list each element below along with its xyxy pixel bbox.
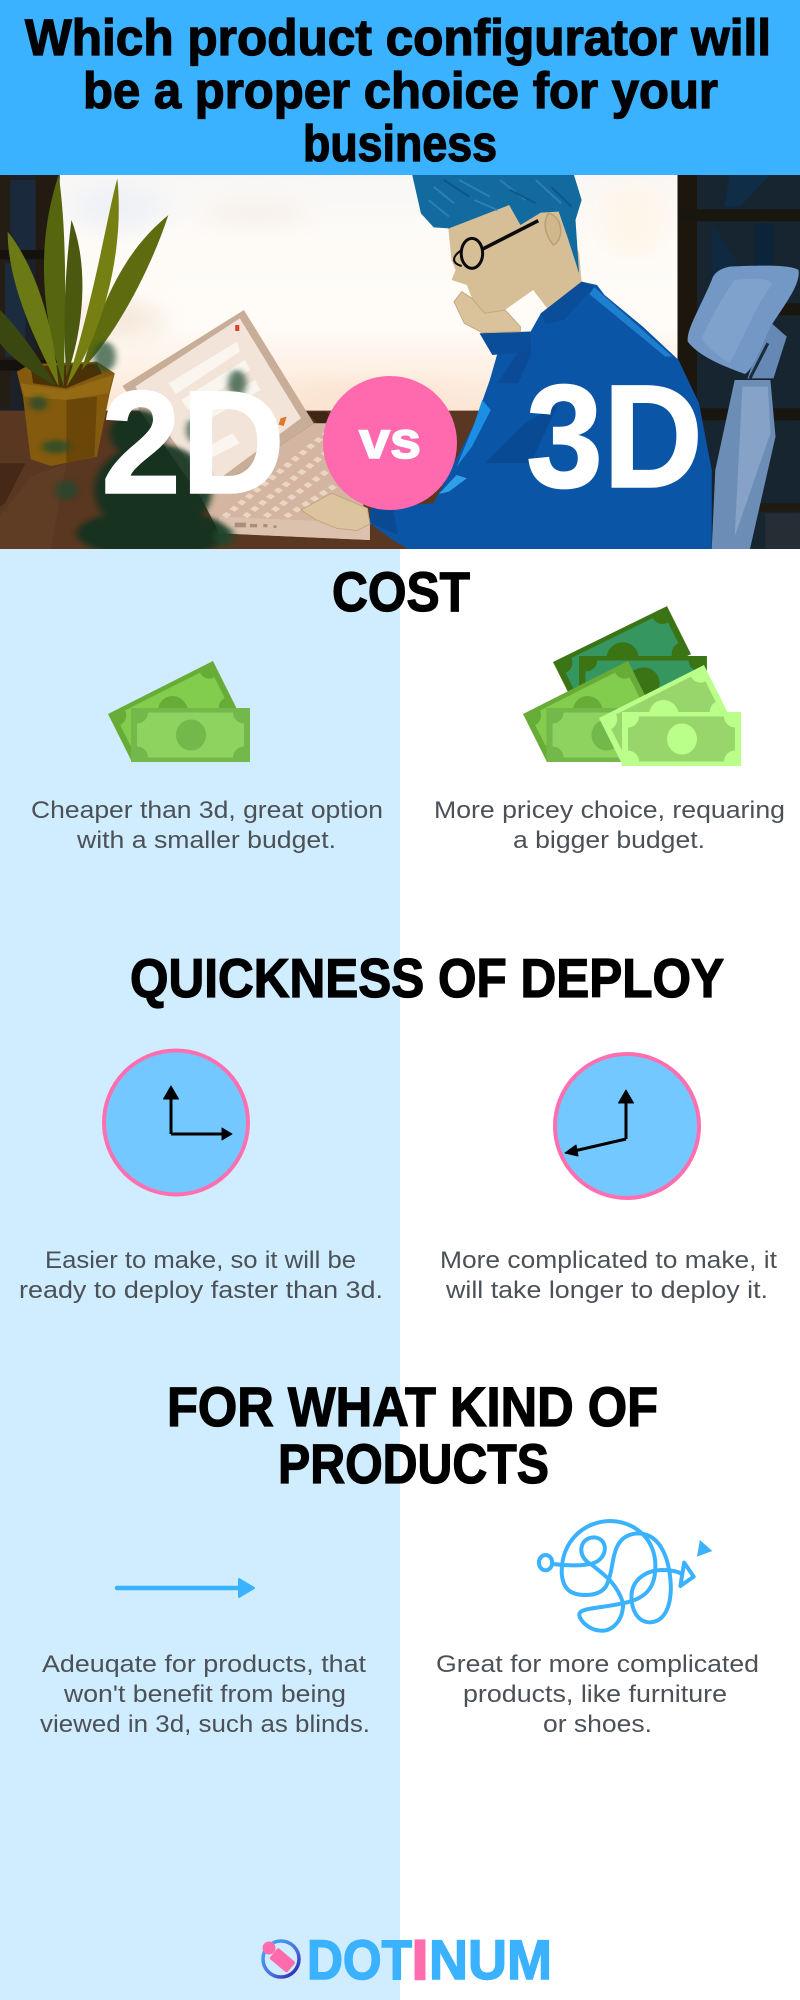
text: cost 3D: More pricey choice, requaring <box>434 797 785 824</box>
label: 2D: 2D <box>101 361 285 525</box>
man: blue hair <box>412 175 582 273</box>
text: products 3D <box>436 1651 759 1738</box>
badge: vs: vs <box>359 412 421 470</box>
desk <box>0 410 479 549</box>
title text: be a proper choice for your <box>83 62 718 119</box>
text: products 2D: viewed in 3d, such as blinds. <box>40 1711 370 1738</box>
chair <box>688 266 799 549</box>
bookshelf right <box>678 170 800 549</box>
icon: tangled arrow (3D) <box>539 1521 712 1631</box>
hero illustration: man at laptop <box>0 170 800 557</box>
icon: single banknote stack (2D) <box>101 653 255 770</box>
logo icon <box>262 1941 299 1977</box>
sky window <box>51 175 684 415</box>
label: 3D: 3D <box>526 355 703 519</box>
logo wordmark: I <box>412 1928 428 1991</box>
text: deploy 2D <box>19 1247 383 1304</box>
text: deploy 2D: ready to deploy faster than 3d. <box>19 1277 383 1304</box>
text: products 2D <box>40 1651 370 1738</box>
man: blue sweater <box>370 282 712 549</box>
title text <box>25 9 771 172</box>
title text: Which product configurator will <box>25 9 771 66</box>
heading: quickness of deploy: QUICKNESS OF DEPLOY <box>130 947 724 1009</box>
text: cost 3D <box>434 797 785 854</box>
text: cost 2D: Cheaper than 3d, great option <box>31 797 383 824</box>
text: deploy 3D <box>440 1247 777 1304</box>
icon: clock 3D <box>555 1054 699 1198</box>
icon: straight arrow (2D) <box>117 1579 254 1597</box>
logo wordmark <box>307 1928 552 1991</box>
title banner <box>0 0 800 175</box>
heading: for what kind of products: FOR WHAT KIND OF <box>167 1375 658 1438</box>
text: products 3D: products, like furniture <box>463 1681 727 1708</box>
text: products 2D: won't benefit from being <box>63 1681 346 1708</box>
text: cost 3D: a bigger budget. <box>513 827 705 854</box>
text: deploy 3D: More complicated to make, it <box>440 1247 777 1274</box>
bookshelf left <box>0 170 60 413</box>
heading: cost: COST <box>332 560 470 623</box>
icon: large banknote stack (3D) <box>516 598 746 774</box>
text: deploy 2D: Easier to make, so it will be <box>45 1247 356 1274</box>
icon: clock 2D <box>104 1050 248 1194</box>
title text: business <box>303 115 497 172</box>
badge: vs <box>323 376 457 510</box>
text: products 2D: Adeuqate for products, that <box>42 1651 366 1678</box>
text: cost 2D <box>31 797 383 854</box>
panel: left 2D column background <box>0 549 400 2000</box>
man: round glasses <box>454 221 538 268</box>
text: products 3D: or shoes. <box>543 1711 652 1738</box>
heading: for what kind of products: PRODUCTS <box>278 1432 549 1495</box>
logo wordmark: DOT <box>307 1928 412 1991</box>
text: products 3D: Great for more complicated <box>436 1651 759 1678</box>
text: cost 2D: with a smaller budget. <box>76 827 336 854</box>
logo wordmark: NUM <box>429 1928 552 1991</box>
man: head and neck <box>448 203 582 313</box>
text: deploy 3D: will take longer to deploy it. <box>445 1277 768 1304</box>
blurred foreground plant <box>29 342 246 557</box>
laptop <box>122 310 370 540</box>
logo: Dotinum <box>262 1928 552 1991</box>
plant pot <box>17 362 115 466</box>
plant leaves <box>0 175 168 387</box>
heading: for what kind of products <box>167 1375 658 1495</box>
man: hands <box>301 292 520 531</box>
